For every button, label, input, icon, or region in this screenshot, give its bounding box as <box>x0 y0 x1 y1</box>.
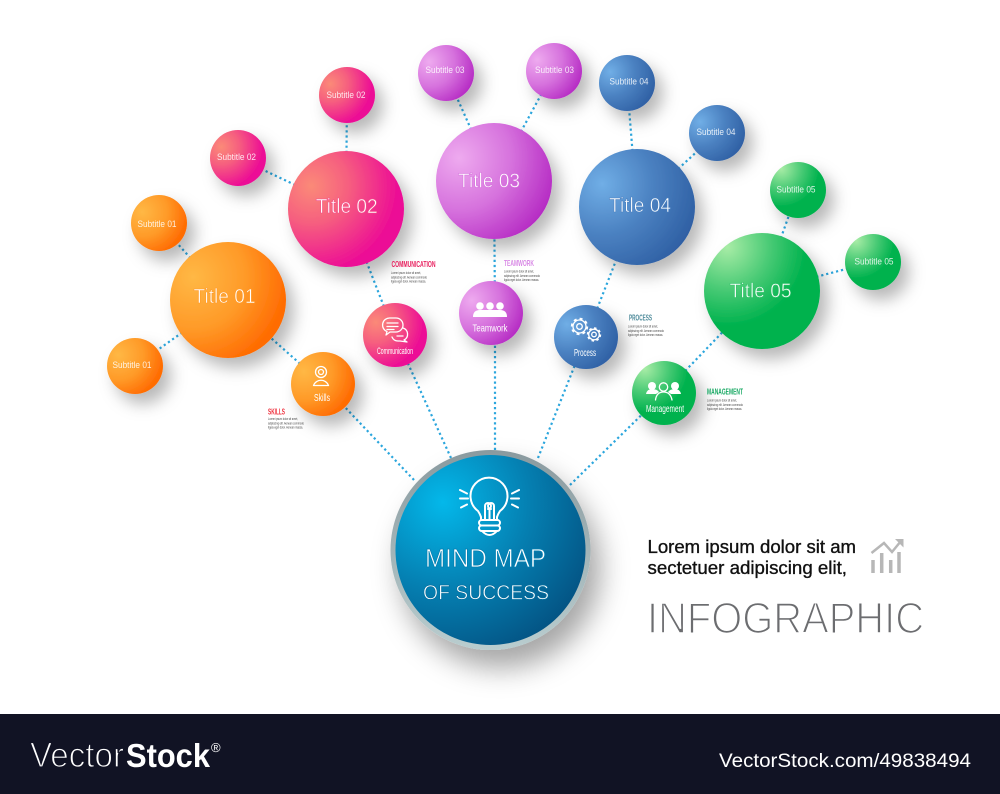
central circle: mind map of success: OF SUCCESS <box>423 580 549 604</box>
branch 05: green <box>704 162 901 349</box>
label: skills <box>268 406 304 430</box>
footer url: VectorStock.com/49838494 <box>719 750 971 772</box>
subtitle bubble 02 top: Subtitle 02 <box>326 90 366 100</box>
footer registered mark: ® <box>211 740 221 755</box>
label: process: adipiscing elit. Aenean commodo <box>628 329 664 333</box>
subtitle bubble 03 left <box>418 45 474 101</box>
label: process: Lorem ipsum dolor sit amet, <box>628 324 658 328</box>
title bubble 05 <box>704 233 820 349</box>
node: skills: Skills <box>314 392 330 404</box>
subtitle bubble 02 left: Subtitle 02 <box>217 152 256 162</box>
label: management: Lorem ipsum dolor sit amet, <box>707 398 737 402</box>
branch 03: violet <box>418 43 582 239</box>
text block: lorem ipsum: sectetuer adipiscing elit, <box>648 558 847 578</box>
title bubble 02: Title 02 <box>316 196 378 218</box>
title bubble 05: Title 05 <box>730 280 792 302</box>
label: communication: Lorem ipsum dolor sit amet, <box>391 271 421 275</box>
node: management <box>632 361 696 425</box>
subtitle bubble 05 top <box>770 162 826 218</box>
branch 01: orange <box>107 195 286 394</box>
title bubble 02 <box>288 151 404 267</box>
label: process <box>628 312 664 337</box>
label: process: PROCESS <box>629 312 652 322</box>
subtitle bubble 03 left: Subtitle 03 <box>426 65 464 75</box>
label: management: adipiscing elit. Aenean commodo <box>707 403 743 407</box>
icon: three people <box>473 302 507 317</box>
central circle: mind map of success: MIND MAP <box>425 545 546 573</box>
subtitle bubble 04 right: Subtitle 04 <box>696 127 736 137</box>
label: teamwork: Lorem ipsum dolor sit amet, <box>504 270 534 274</box>
footer bar <box>0 714 1000 794</box>
node: teamwork <box>459 281 523 345</box>
icon: person <box>314 366 328 386</box>
label: skills: SKILLS <box>268 406 285 416</box>
subtitle bubble 04 top <box>599 55 655 111</box>
label: communication: COMMUNICATION <box>392 259 436 269</box>
node: management: Management <box>646 404 684 415</box>
label: teamwork: ligula eget dolor. Aenean massa. <box>504 278 539 282</box>
title bubble 01 <box>170 242 286 358</box>
footer logo: Vector <box>30 736 124 775</box>
icon: speech bubbles <box>383 318 408 342</box>
subtitle bubble 03 right <box>526 43 582 99</box>
node: communication: Communication <box>377 346 413 356</box>
node: teamwork: Teamwork <box>472 322 508 334</box>
subtitle bubble 01 top: Subtitle 01 <box>138 219 176 229</box>
footer logo <box>30 736 211 775</box>
subtitle bubble 03 right: Subtitle 03 <box>535 65 574 75</box>
title bubble 01: Title 01 <box>194 286 256 308</box>
title bubble 04: Title 04 <box>609 195 671 217</box>
text block: lorem ipsum <box>648 537 856 578</box>
label: management: MANAGEMENT <box>707 386 743 396</box>
central circle: mind map of success <box>390 450 590 650</box>
label: process: ligula eget dolor. Aenean massa. <box>628 333 663 337</box>
title bubble 03: Title 03 <box>458 170 520 192</box>
subtitle bubble 02 left <box>210 130 266 186</box>
footer logo: Stock <box>126 737 211 774</box>
connector lines <box>135 71 873 485</box>
label: management <box>707 386 743 411</box>
label: teamwork: adipiscing elit. Aenean commodo <box>504 274 540 278</box>
branch 04: blue <box>579 55 745 265</box>
label: teamwork: TEAMWORK <box>504 258 535 268</box>
label: management: ligula eget dolor. Aenean massa. <box>707 407 742 411</box>
title bubble 03 <box>436 123 552 239</box>
label: communication <box>391 259 436 284</box>
subtitle bubble 05 right: Subtitle 05 <box>854 256 894 266</box>
label: communication: ligula eget dolor. Aenean massa. <box>391 280 426 284</box>
subtitle bubble 01 top <box>131 195 187 251</box>
heading: infographic: INFOGRAPHIC <box>647 595 924 643</box>
subtitle bubble 04 right <box>689 105 745 161</box>
subtitle bubble 01 bottom <box>107 338 163 394</box>
icon: group of people <box>646 382 681 400</box>
label: skills: Lorem ipsum dolor sit amet, <box>268 417 298 421</box>
node: process: Process <box>574 347 596 359</box>
label: teamwork <box>504 258 540 282</box>
node: process <box>554 305 618 369</box>
subtitle bubble 05 top: Subtitle 05 <box>776 184 816 194</box>
label: communication: adipiscing elit. Aenean commodo <box>391 275 427 279</box>
icon: light bulb <box>460 478 519 535</box>
subtitle bubble 02 top <box>319 67 375 123</box>
subtitle bubble 01 bottom: Subtitle 01 <box>112 360 152 370</box>
subtitle bubble 04 top: Subtitle 04 <box>610 76 648 86</box>
subtitle bubble 05 right <box>845 234 901 290</box>
icon: growth chart <box>872 539 904 573</box>
title bubble 04 <box>579 149 695 265</box>
icon: gears <box>572 319 600 341</box>
label: skills: adipiscing elit. Aenean commodo <box>268 421 304 425</box>
text block: lorem ipsum: Lorem ipsum dolor sit am <box>648 537 856 557</box>
node: communication <box>363 303 427 367</box>
label: skills: ligula eget dolor. Aenean massa. <box>268 426 303 430</box>
node: skills <box>291 352 355 416</box>
branch 02: pink <box>210 67 404 267</box>
